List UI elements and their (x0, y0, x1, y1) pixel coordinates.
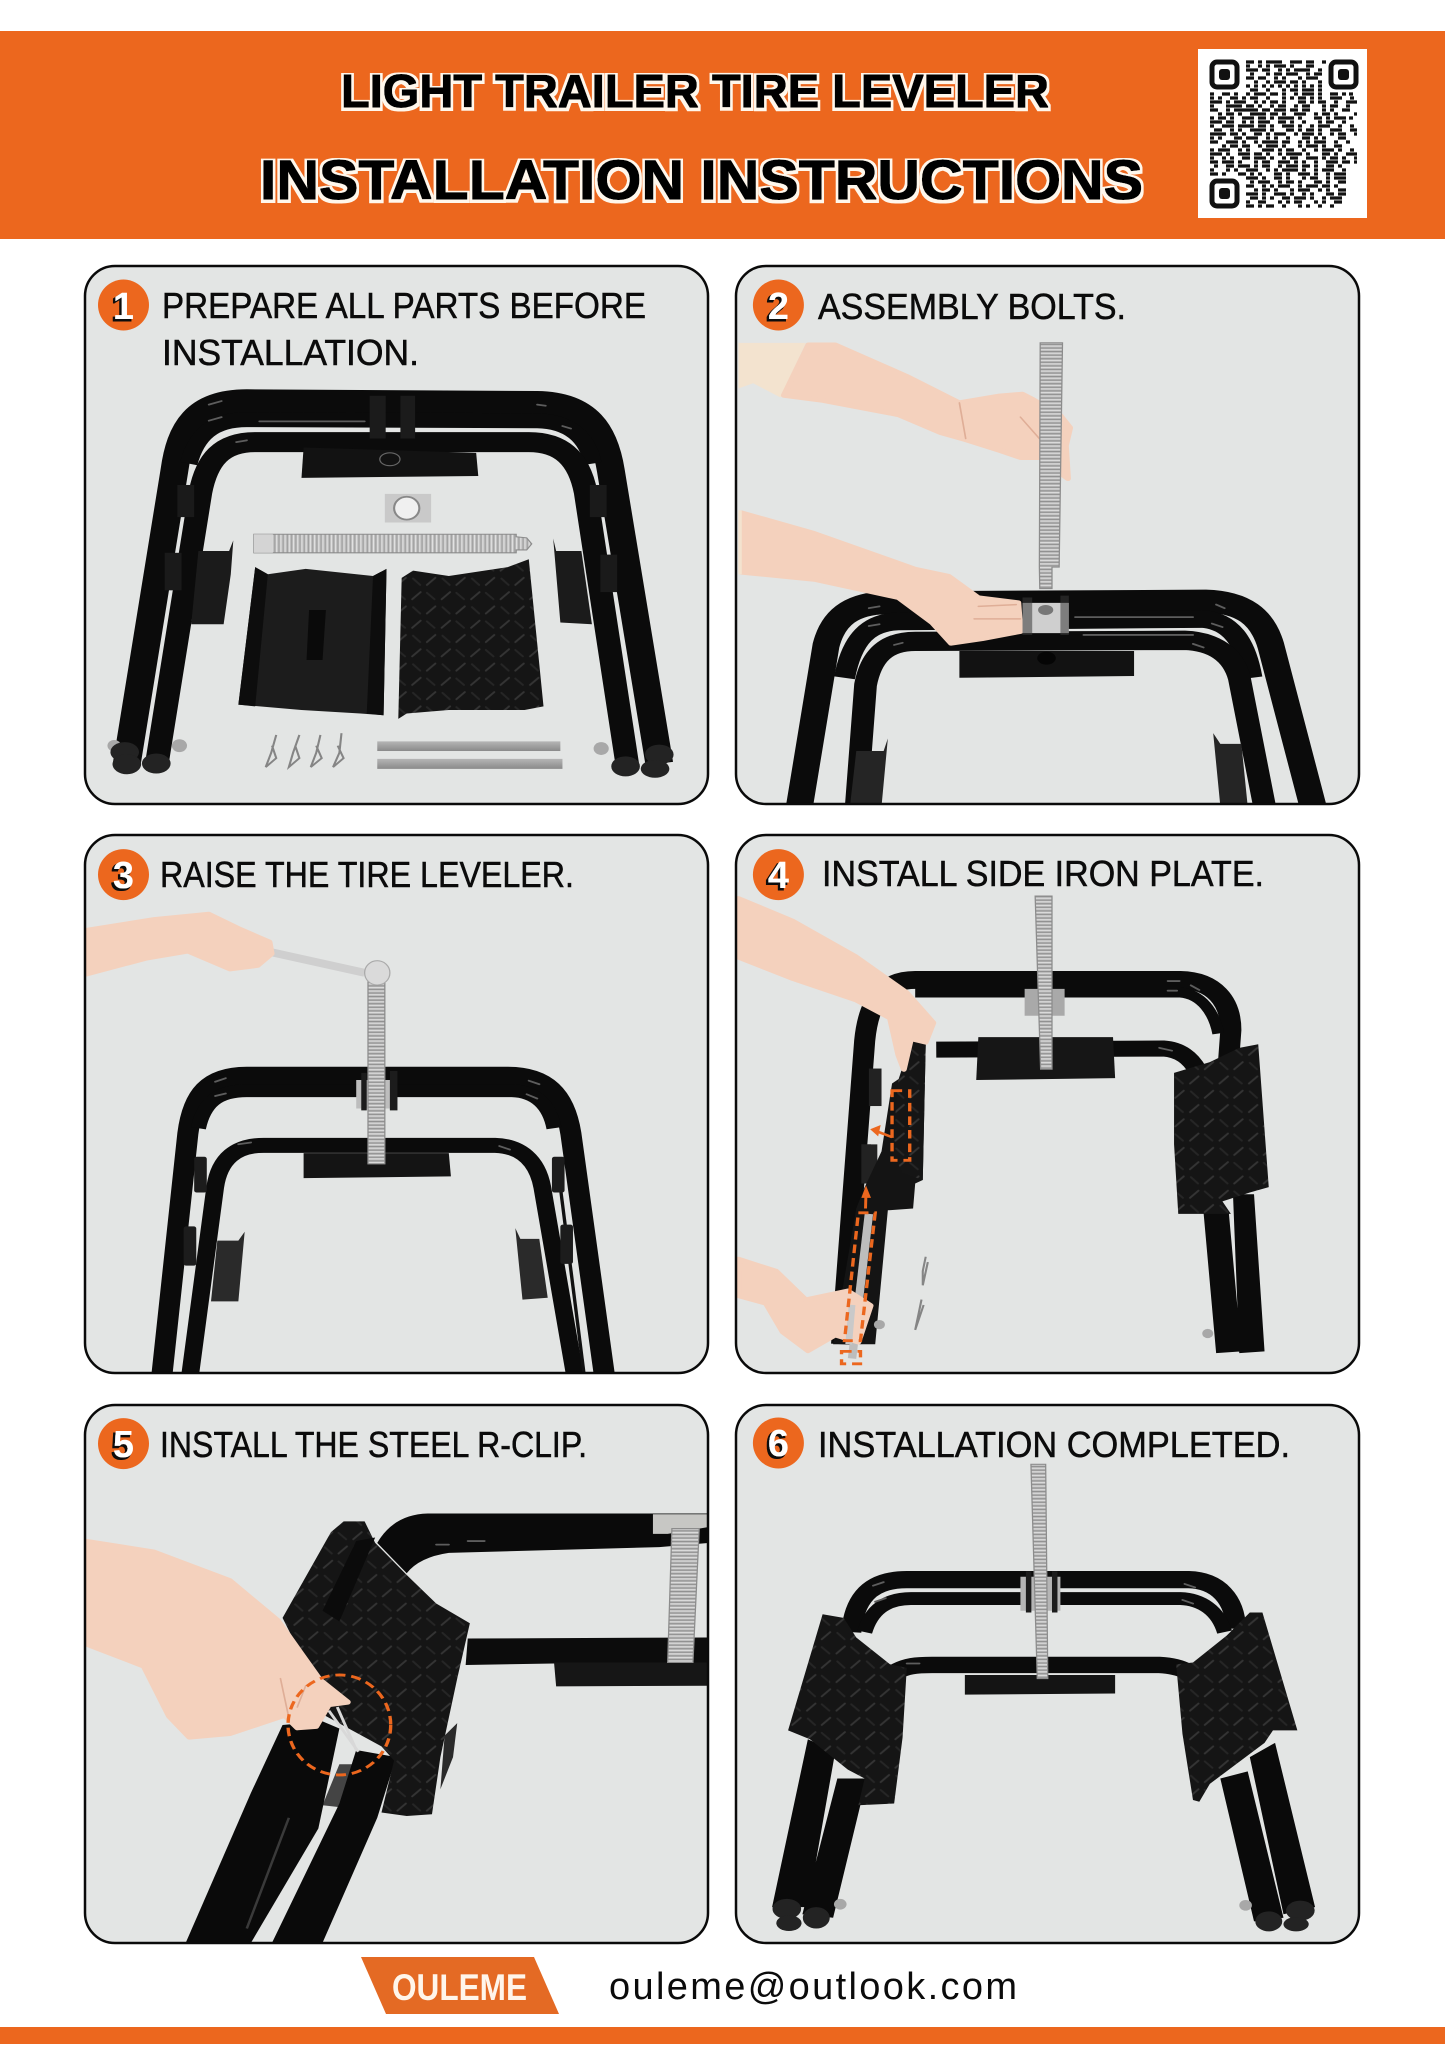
illustration: parts layout (107, 396, 674, 778)
rubber caps (773, 1899, 1315, 1931)
orange dashed guides (842, 1091, 910, 1364)
step 5 number badge: 5 (113, 1424, 134, 1466)
illustration: hand inserting R-clip (87, 1514, 710, 1943)
lower arm and hand (738, 1259, 871, 1351)
shirt sleeve (738, 343, 806, 397)
step 5 heading: INSTALL THE STEEL R-CLIP. (160, 1424, 587, 1465)
QR code (1198, 49, 1367, 218)
rear and front tube legs (323, 1764, 352, 1807)
header banner (0, 31, 1445, 239)
step 4 heading: INSTALL SIDE IRON PLATE. (822, 853, 1264, 894)
illustration: hands placing bolt in frame (738, 343, 1313, 806)
panel: step 3 raise leveler (85, 835, 708, 1376)
silver R-clip (329, 1707, 358, 1752)
panel: step 5 install R-clip (85, 1405, 710, 1943)
illustration: completed leveler (772, 1464, 1315, 1931)
step 1 heading: PREPARE ALL PARTS BEFORE (162, 285, 646, 326)
right plate and legs (1204, 1194, 1265, 1353)
threaded bolt (368, 980, 385, 1164)
R-clips (915, 1257, 928, 1330)
illustration: wrench raising the frame (87, 914, 605, 1376)
step 3 heading: RAISE THE TIRE LEVELER. (160, 854, 574, 895)
step 1 number badge (98, 280, 149, 330)
lower arm and hand (741, 513, 1020, 643)
upper arm and hand (738, 899, 933, 1069)
step 3 number badge (98, 849, 149, 900)
legs (772, 1739, 1315, 1921)
silver pin (852, 1214, 869, 1359)
arm and hand (87, 914, 272, 974)
footer brand logo: OULEME (392, 1967, 527, 2008)
title: installation instructions: INSTALLATION INSTRUCTIONS (260, 148, 1143, 211)
step 2 heading: ASSEMBLY BOLTS. (818, 286, 1126, 327)
threaded bolt and clamp (1025, 989, 1065, 1016)
step 6 heading: INSTALLATION COMPLETED. (818, 1424, 1290, 1465)
panel: step 2 assembly bolts (736, 266, 1359, 806)
side plates (788, 1614, 907, 1805)
step 1 heading: INSTALLATION. (162, 332, 419, 373)
illustration: fitting side iron plate (738, 896, 1269, 1364)
step 3 number badge: 3 (113, 855, 134, 897)
title: product name: LIGHT TRAILER TIRE LEVELER (341, 65, 1049, 117)
tread plate (283, 1521, 470, 1816)
footer email: ouleme@outlook.com (609, 1966, 1017, 2008)
step 2 number badge (753, 280, 804, 330)
step 1 number badge: 1 (113, 286, 134, 328)
hand (87, 1541, 348, 1737)
step 5 number badge (98, 1418, 149, 1469)
orange dashed circle (288, 1675, 391, 1775)
panel: step 4 install side plate (736, 835, 1359, 1373)
threaded bolt and clamp (1020, 1577, 1060, 1611)
step 4 number badge (753, 849, 804, 900)
orange arrows (861, 1125, 892, 1209)
upper arm and hand (784, 345, 1070, 479)
panel: step 1 prepare parts (85, 266, 708, 804)
panel: step 6 completed (736, 1405, 1359, 1943)
step 6 number badge (753, 1418, 804, 1468)
step 4 number badge: 4 (768, 855, 789, 897)
wrench (268, 951, 365, 973)
threaded bolt (1039, 343, 1063, 589)
footer bar (0, 2027, 1445, 2044)
step 6 number badge: 6 (768, 1423, 789, 1465)
footer brand logo (361, 1957, 559, 2014)
step 2 number badge: 2 (768, 286, 789, 328)
